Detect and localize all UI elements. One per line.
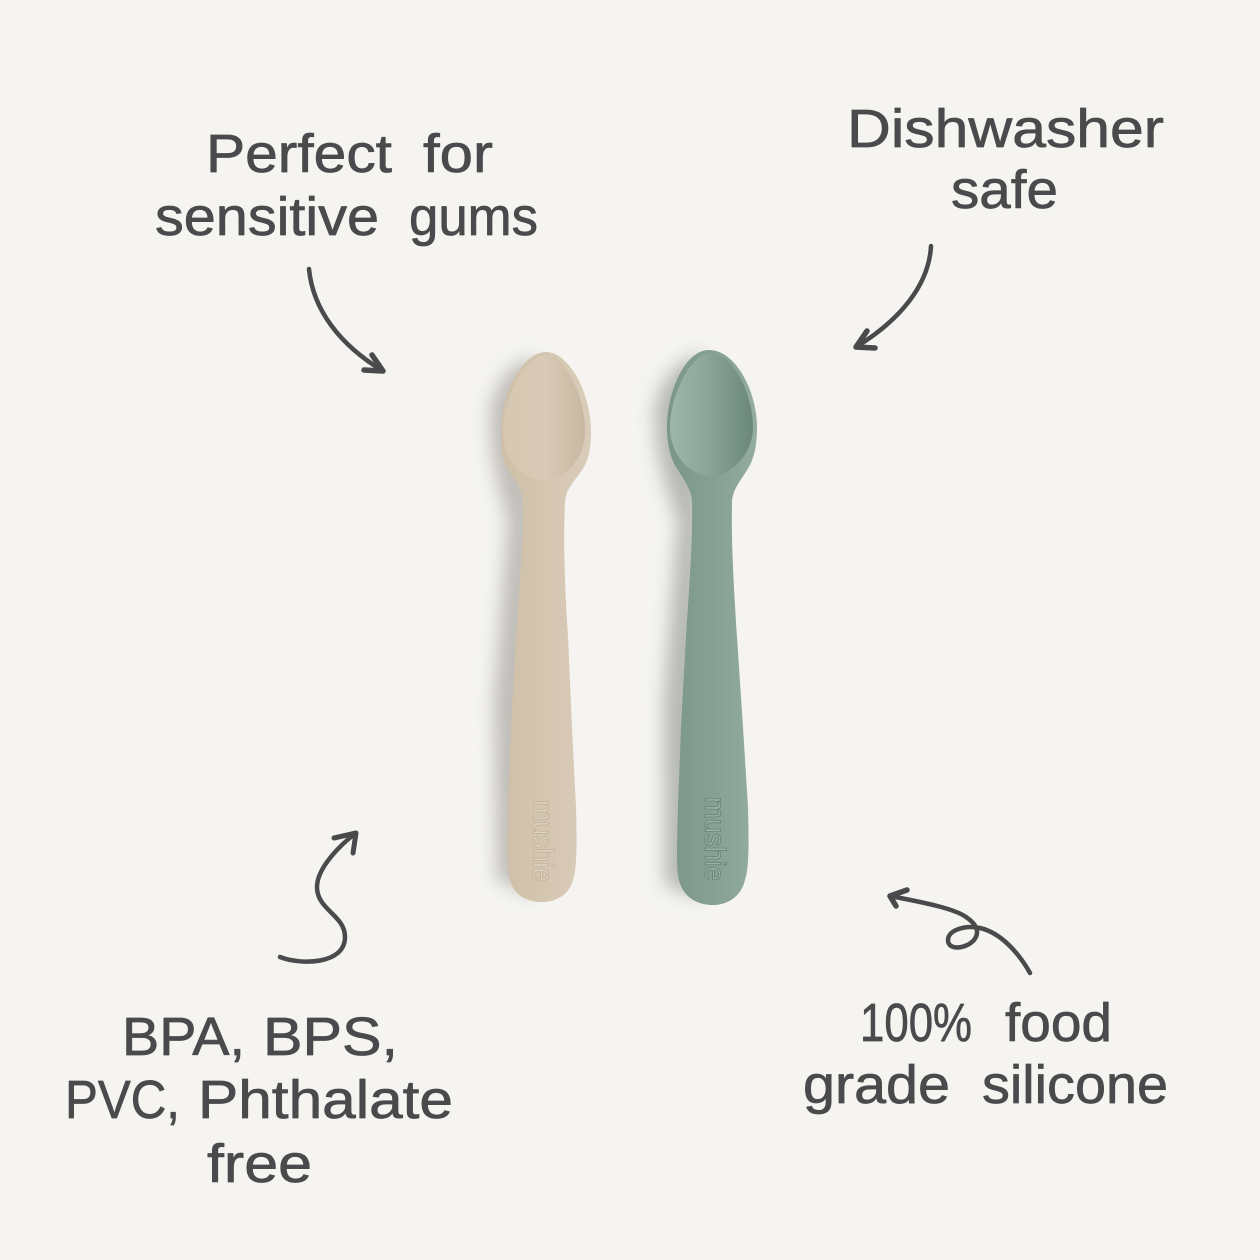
arrow: food grade silicone to spoon — [890, 890, 1030, 973]
arrow: sensitive gums to spoon — [309, 269, 383, 371]
heading: dishwasher safe: safe — [951, 160, 1058, 220]
heading: perfect for sensitive gums: Perfect — [206, 124, 392, 184]
heading: 100% food grade silicone: 100% — [860, 993, 972, 1053]
heading: dishwasher safe: Dishwasher — [847, 99, 1164, 159]
heading: perfect for sensitive gums: sensitive — [155, 187, 379, 247]
spoon: beige — [490, 352, 591, 902]
beige spoon shadow — [490, 358, 535, 895]
green spoon logo: mushie — [698, 797, 731, 881]
beige spoon body — [501, 352, 591, 902]
arrow: BPA free to spoon — [280, 833, 356, 962]
heading: 100% food grade silicone: food — [1005, 993, 1112, 1053]
heading: perfect for sensitive gums — [155, 124, 538, 247]
heading: 100% food grade silicone — [803, 993, 1168, 1115]
green spoon shadow — [655, 355, 702, 898]
spoon: green — [655, 350, 757, 905]
heading: perfect for sensitive gums: for — [423, 124, 493, 184]
heading: 100% food grade silicone: silicone — [982, 1055, 1168, 1115]
heading: BPA, BPS, PVC, Phthalate free: BPA, — [122, 1007, 245, 1067]
heading: BPA, BPS, PVC, Phthalate free: BPS, — [263, 1007, 398, 1067]
green spoon body — [667, 350, 757, 905]
heading: 100% food grade silicone: grade — [803, 1055, 950, 1115]
heading: BPA, BPS, PVC, Phthalate free: Phthalate — [198, 1070, 453, 1130]
beige spoon logo: mushie — [526, 800, 559, 882]
green spoon bowl — [670, 353, 753, 476]
heading: perfect for sensitive gums: gums — [409, 187, 538, 247]
beige spoon bowl — [503, 355, 585, 480]
heading: BPA, BPS, PVC, Phthalate free — [65, 1007, 453, 1194]
arrow: dishwasher safe to spoon — [856, 246, 931, 348]
heading: BPA, BPS, PVC, Phthalate free: free — [207, 1134, 312, 1194]
heading: BPA, BPS, PVC, Phthalate free: PVC, — [65, 1070, 180, 1130]
heading: dishwasher safe — [847, 99, 1164, 220]
